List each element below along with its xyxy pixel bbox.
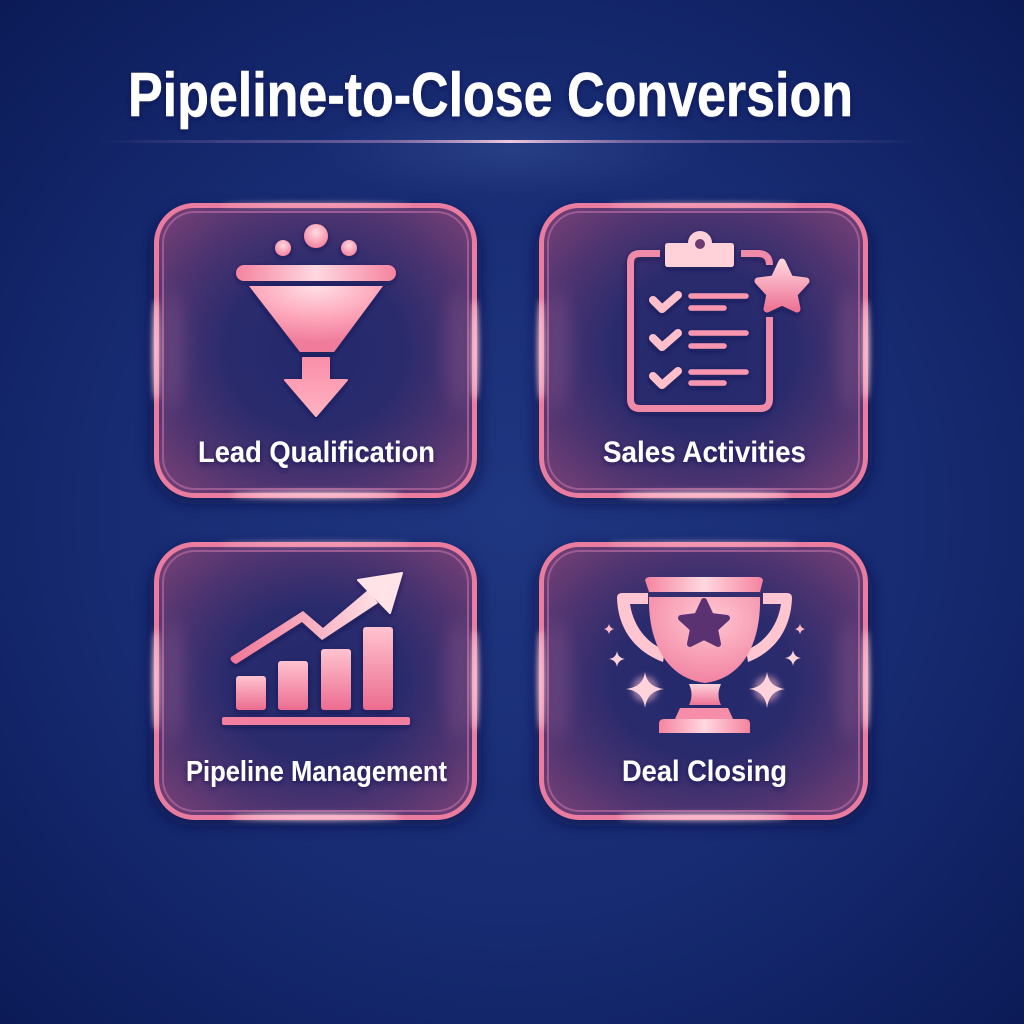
card frame — [535, 203, 872, 504]
card frame — [150, 203, 481, 504]
label: Sales Activities — [603, 436, 806, 469]
card frame — [535, 542, 872, 826]
title divider — [100, 140, 920, 143]
icon: growth chart — [222, 573, 410, 725]
label: Pipeline Management — [186, 756, 447, 788]
panel: sales activities — [535, 203, 872, 504]
card frame — [150, 542, 481, 826]
panel: deal closing — [535, 542, 872, 826]
icon: trophy with sparkles — [604, 577, 805, 733]
label: Lead Qualification — [198, 436, 435, 469]
icon: clipboard with star — [630, 231, 806, 408]
icon: funnel — [236, 224, 396, 416]
panel: lead qualification — [150, 203, 481, 504]
title glow — [312, 102, 712, 198]
panel: pipeline management — [150, 542, 481, 826]
title: Pipeline-to-Close Conversion — [128, 61, 853, 130]
label: Deal Closing — [622, 755, 787, 788]
